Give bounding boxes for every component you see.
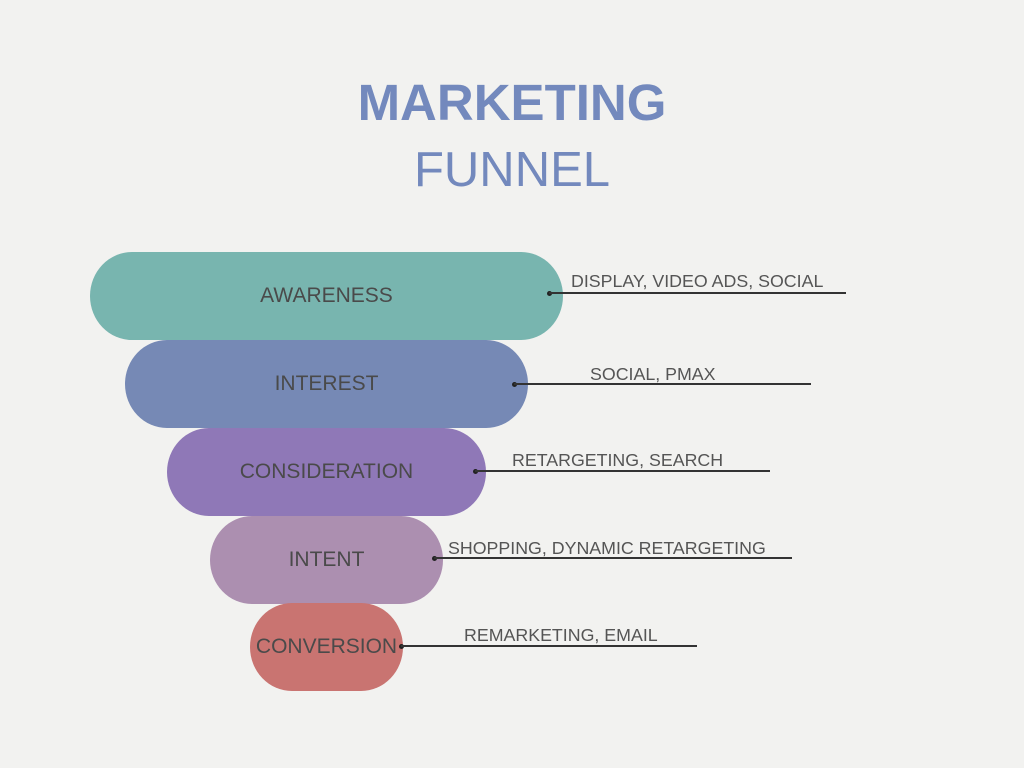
callout: intent (432, 538, 792, 561)
subtitle: FUNNEL (414, 143, 610, 197)
text: SOCIAL, PMAX (590, 364, 716, 384)
stage: intent (210, 516, 443, 604)
stage: conversion (250, 603, 403, 691)
text: SHOPPING, DYNAMIC RETARGETING (448, 538, 766, 558)
stage: interest: INTEREST (275, 372, 378, 395)
callout: awareness (547, 271, 846, 296)
callout: conversion (399, 625, 697, 649)
stage: awareness: AWARENESS (260, 284, 393, 307)
stage: consideration: CONSIDERATION (240, 460, 413, 483)
callout: interest (512, 364, 811, 387)
stage: conversion: CONVERSION (256, 635, 397, 658)
text: REMARKETING, EMAIL (464, 625, 658, 645)
title: MARKETING (358, 74, 666, 131)
text: DISPLAY, VIDEO ADS, SOCIAL (571, 271, 823, 291)
stage: interest (125, 340, 528, 428)
stage: intent: INTENT (289, 548, 364, 571)
stage: consideration (167, 428, 486, 516)
stage: awareness (90, 252, 563, 340)
callout: consideration (473, 450, 770, 474)
text: RETARGETING, SEARCH (512, 450, 723, 470)
